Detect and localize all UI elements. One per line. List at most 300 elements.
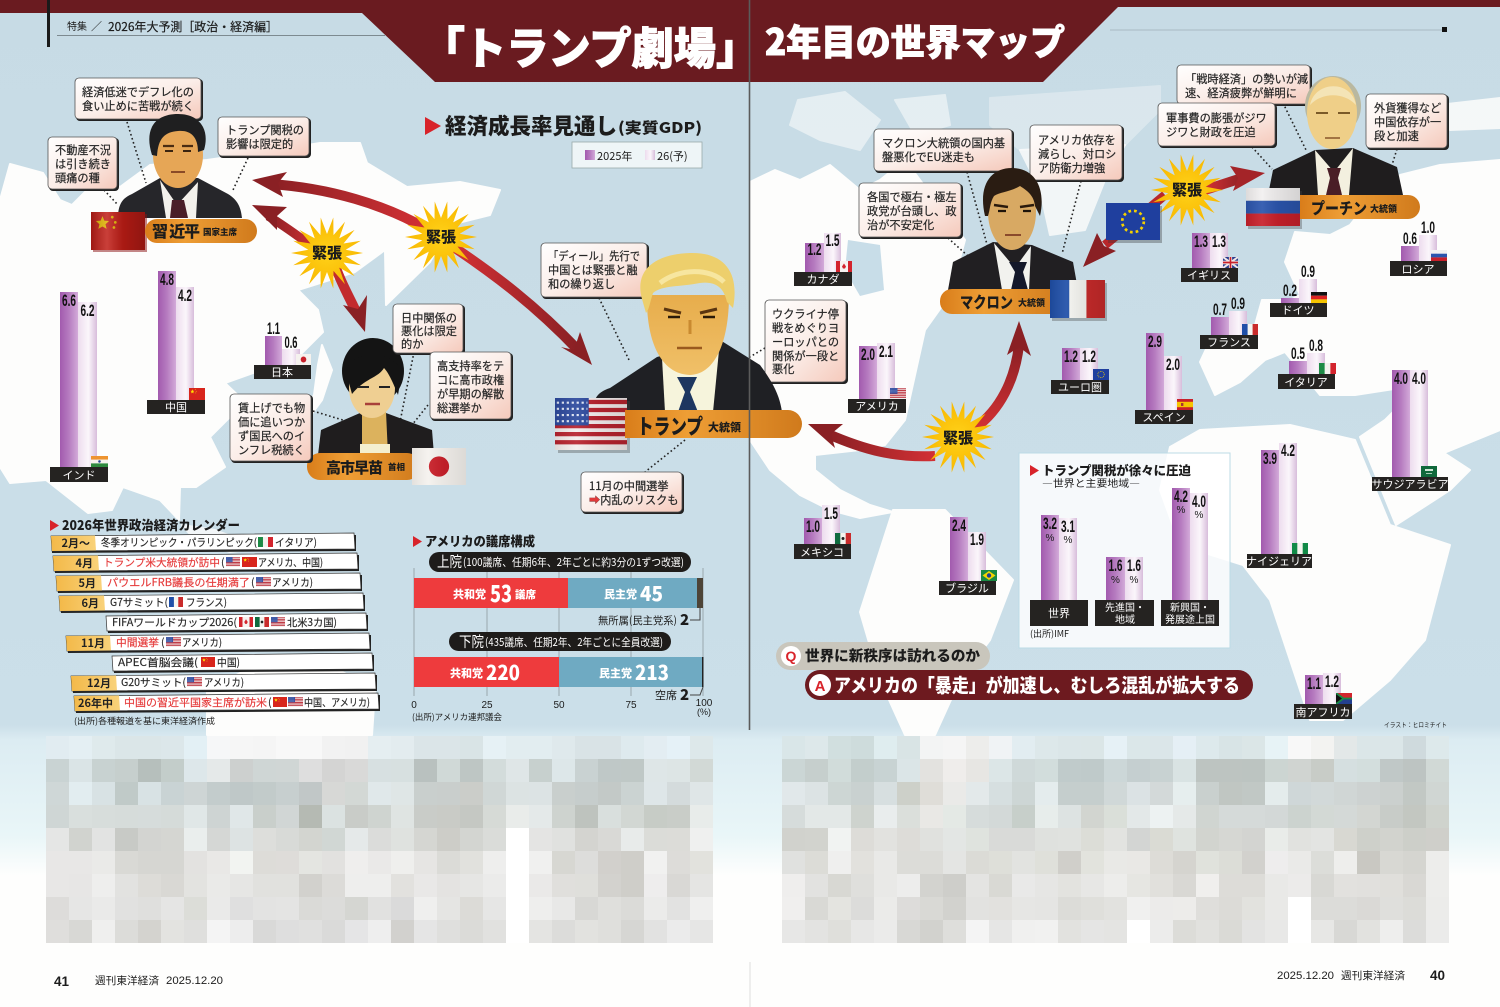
legend: 26(予) (657, 148, 688, 164)
callout: Ukraine: ウクライナ停 (772, 306, 839, 322)
row: within 2026 (74, 693, 380, 713)
calendar heading: 2026年世界政治経済カレンダー (62, 515, 240, 534)
callout: far right: 政党が台頭し、政 (867, 203, 957, 219)
bars: advanced: 1.6 (1108, 557, 1122, 575)
vacant label: 空席 (655, 687, 677, 703)
arrow: tension to USA (808, 424, 935, 456)
bar chart: Spain: 2.0 (1166, 356, 1180, 374)
footer left: 週刊東洋経済 (95, 973, 160, 988)
bars: advanced (1095, 557, 1154, 626)
heading: GDP outlook (425, 109, 702, 141)
bar chart: India: 6.2 (80, 302, 94, 320)
heading: tariff (1030, 460, 1191, 490)
tension burst left 1: 緊張 (312, 242, 342, 263)
bars: emerging: % (1177, 505, 1186, 516)
name plate: Trump: 大統領 (708, 419, 741, 435)
row: April: ( (221, 555, 225, 570)
row: February: 冬季オリンピック・パラリンピック( (101, 535, 257, 550)
bar chart: Russia: 1.0 (1421, 219, 1435, 237)
name plate: Takaichi: 首相 (388, 461, 405, 473)
flag: Russia (1246, 188, 1302, 229)
bar chart: Brazil: 1.9 (970, 531, 984, 549)
callout: midterms: 11月の中間選挙 (589, 478, 669, 494)
callout: far right (859, 183, 963, 239)
callout: EU disarray (874, 129, 1014, 173)
name plate: Xi (145, 218, 257, 243)
bar chart: Nigeria: ナイジェリア (1246, 553, 1312, 569)
callout: Japan-China: 的か (401, 336, 423, 352)
flag: France (1050, 280, 1107, 321)
main title left: 」 (716, 13, 760, 77)
bar chart: China: 4.2 (178, 287, 192, 305)
callout: tariffs limited: トランプ関税の (226, 122, 304, 138)
bars: advanced: 先進国・ (1105, 599, 1145, 614)
bars: advanced: 地域 (1115, 611, 1135, 626)
callout: Ukraine (765, 300, 848, 384)
bar chart: Spain (1135, 333, 1193, 425)
bar chart: Eurozone (1051, 348, 1109, 395)
bar chart: USA: アメリカ (855, 398, 899, 414)
bars: emerging: 発展途上国 (1165, 611, 1215, 626)
bar chart: China: 中国 (165, 399, 187, 415)
row: February (51, 533, 356, 553)
senate bar: 53 (490, 575, 512, 609)
portrait: Trump (593, 253, 782, 412)
callout: wages: 賃上げでも物 (238, 400, 305, 416)
bars: world: 世界 (1048, 605, 1070, 621)
row: December: G20サミット( (121, 675, 186, 690)
footer right: 40 (1430, 967, 1445, 983)
callout: EU disarray: 盤悪化でEU迷走も (882, 149, 975, 165)
panel: Takaichi (230, 304, 513, 485)
bar chart: Nigeria: 3.9 (1263, 450, 1277, 468)
tension burst left 2 (405, 202, 477, 272)
bars: world: % (1064, 535, 1073, 546)
bar chart: Mexico: メキシコ (800, 544, 844, 560)
callout: war economy (1177, 65, 1312, 106)
callout: defence (1030, 125, 1124, 182)
callout: midterms (581, 472, 684, 514)
house bar: 213 (635, 657, 669, 686)
portrait: Takaichi (318, 338, 434, 455)
flag: USA (555, 398, 630, 453)
bar chart: Saudi Arabia (1372, 370, 1448, 492)
row: November: 中間選挙 (116, 635, 160, 650)
row: December: アメリカ) (204, 675, 244, 690)
row: May: ( (251, 575, 255, 590)
house bar: 220 (486, 657, 520, 686)
congress heading: アメリカの議席構成 (425, 531, 535, 550)
bars: advanced: % (1111, 575, 1120, 586)
bar chart: Canada: 1.5 (826, 232, 840, 250)
running header: 特集 (67, 18, 87, 33)
name plate: Xi: 習 近平 (152, 218, 200, 242)
tension burst left 2: 緊張 (426, 226, 456, 247)
bar chart: Eurozone: ユーロ圏 (1058, 379, 1102, 395)
row: February: 2月〜 (62, 535, 90, 551)
question pill: 世界に新秩序は訪れるのか (805, 645, 981, 666)
senate bar: 45 (640, 578, 663, 607)
bar chart: Brazil: ブラジル (945, 580, 989, 596)
arrow: tension to France (975, 321, 1031, 428)
flag: Japan (412, 448, 466, 485)
bar chart: UK (1181, 233, 1238, 283)
callout: wages: ず国民へのイ (238, 428, 305, 444)
world map land masses (0, 86, 1500, 735)
bar chart: Canada: 1.2 (808, 241, 822, 259)
bar chart: Germany: ドイツ (1282, 302, 1314, 318)
source: IMF: (出所)IMF (1030, 627, 1069, 640)
axis labels: 50 (553, 700, 565, 711)
heading: tariff: ―世界と主要地域― (1042, 475, 1140, 490)
arrow: tension to Trump (455, 248, 592, 365)
row: APEC: APEC首脳会議( (118, 655, 198, 670)
vacant label: 2 (680, 684, 689, 705)
callout: real estate: は引き続き (55, 156, 111, 172)
callout: Ukraine: 悪化 (772, 361, 794, 377)
callout: tariffs limited: 影響は限定的 (226, 136, 293, 152)
tension burst right top (1151, 154, 1223, 226)
bar chart: Germany (1270, 263, 1327, 318)
bar chart: Mexico: 1.5 (824, 505, 838, 523)
Hudson Bay (845, 240, 884, 296)
bar chart: France: 0.7 (1213, 301, 1227, 319)
congress source: (出所)アメリカ連邦議会 (412, 710, 502, 723)
row: within 2026: ( (268, 695, 272, 710)
bar chart: Japan: 1.1 (267, 320, 280, 338)
bar chart: China: 4.8 (160, 271, 174, 289)
bar chart: UK: 1.3 (1212, 233, 1226, 251)
row: within 2026: 中国の習近平国家主席が訪米 (124, 695, 268, 710)
row: within 2026: 中国、アメリカ) (304, 695, 370, 710)
callout: real estate: 不動産不況 (55, 142, 111, 158)
name plate: Trump: トランプ (637, 411, 703, 441)
bar chart: USA: 2.1 (879, 343, 893, 361)
axis labels (411, 698, 713, 717)
bar chart: Eurozone: 1.2 (1082, 348, 1096, 366)
panel: US Congress seats (411, 531, 713, 723)
legend (572, 142, 702, 168)
bars: emerging: 4.2 (1174, 488, 1188, 506)
arrow: tension to Russia (1205, 166, 1265, 191)
footer left: 41 (54, 973, 69, 989)
callout: early election: コに高市政権 (437, 372, 504, 388)
panel: Xi Jinping (48, 78, 311, 252)
callout: EU disarray: マクロン大統領の国内基 (882, 135, 1005, 151)
question pill: Q (786, 648, 797, 664)
name plate: Macron: マクロン (960, 289, 1013, 313)
bar chart: USA (848, 343, 906, 414)
name plate: Putin: プーチン (1311, 195, 1367, 219)
running header: ／ (91, 20, 102, 33)
bar chart: South Africa (1294, 673, 1352, 720)
row: November: アメリカ) (182, 635, 222, 650)
name plate: Putin (1300, 195, 1420, 219)
bar chart: UK: 1.3 (1194, 233, 1208, 251)
row: June: フランス) (186, 595, 227, 610)
row: May (56, 573, 362, 593)
senate label: (100議席、任期6年、2年ごとに約3分の1ずつ改選) (463, 554, 684, 570)
portrait: Macron (948, 168, 1078, 290)
house label: 下院 (459, 631, 484, 652)
callout: Ukraine: ーロッパとの (772, 334, 839, 350)
callout: early election: 高支持率をテ (437, 358, 504, 374)
bar chart: South Africa: 1.1 (1307, 675, 1321, 693)
row: May: 5月 (78, 575, 96, 591)
callout: Japan-China: 悪化は限定 (401, 323, 457, 339)
heading: GDP outlook: (実質GDP) (618, 117, 702, 138)
illustration credit: イラスト：ヒロミチイト (1384, 719, 1447, 729)
callout: deflation: 食い止めに苦戦が続く (82, 98, 194, 114)
row: April: アメリカ、中国) (258, 555, 323, 570)
panel: Trump (541, 243, 848, 514)
bar chart: Saudi Arabia: 4.0 (1394, 370, 1408, 388)
answer pill: A (815, 678, 826, 695)
row: June: 6月 (82, 595, 99, 611)
arrow: EU to France (1083, 195, 1165, 267)
bars: world: 3.1 (1061, 518, 1075, 536)
bars: world: % (1046, 533, 1055, 544)
panel: Putin (1158, 65, 1449, 229)
bar chart: France (1200, 295, 1258, 350)
row: December: 12月 (87, 675, 111, 691)
bar chart: France: 0.9 (1231, 295, 1245, 313)
house bar: 共和党 (450, 665, 483, 681)
row: February: イタリア) (275, 535, 317, 550)
portrait: Putin (1268, 76, 1403, 195)
bar chart: Italy: イタリア (1284, 374, 1328, 390)
callout: early election: が早期の解散 (437, 386, 504, 402)
blurred body text right (782, 736, 1449, 943)
independents label: 2 (680, 609, 689, 630)
heading: GDP outlook: 経済成長率見通し (445, 109, 617, 141)
callout: deflation (75, 78, 203, 121)
callout: deal: 「ディール」先行で (548, 248, 640, 264)
senate bar: 議席 (515, 587, 536, 602)
bar chart: Japan: 0.6 (284, 334, 298, 352)
header rule right (1110, 27, 1447, 32)
axis labels: 25 (481, 700, 493, 711)
house label: (435議席、任期2年、2年ごとに全員改選) (485, 634, 663, 650)
callout: Japan-China (393, 304, 465, 355)
bar chart: Russia: ロシア (1402, 261, 1434, 277)
bars: advanced: % (1130, 575, 1139, 586)
callout: real estate: 頭痛の種 (55, 170, 100, 186)
panel: tariff pressure chart (1019, 453, 1230, 648)
row: June: G7サミット( (110, 595, 168, 610)
axis labels: (%) (697, 707, 711, 717)
bar chart: Germany: 0.9 (1301, 263, 1315, 281)
bars: emerging: % (1195, 510, 1204, 521)
row: within 2026: 26年中 (78, 695, 113, 711)
tension burst left 1 (291, 218, 363, 288)
callout: wages: ンフレ税続く (238, 442, 305, 458)
bars: emerging: 4.0 (1192, 493, 1206, 511)
callout: early election: 総選挙か (437, 400, 482, 416)
bar chart: Spain: 2.9 (1148, 333, 1162, 351)
name plate: Xi: 国家主席 (203, 226, 238, 238)
bar chart: USA: 2.0 (861, 346, 875, 364)
bar chart: India (50, 292, 108, 483)
row: November: ( (161, 635, 165, 650)
arrow: tension to Japan (336, 268, 367, 332)
bars: emerging (1161, 488, 1219, 626)
tension burst right bottom (922, 402, 994, 472)
row: April (53, 553, 359, 573)
callout: deflation: 経済低迷でデフレ化の (82, 84, 194, 100)
bar chart: Italy: 0.8 (1309, 337, 1323, 355)
bar chart: Japan (254, 320, 311, 380)
bars: world: 3.2 (1043, 515, 1057, 533)
bar chart: Spain: スペイン (1142, 409, 1186, 425)
callout: foreign currency: 段と加速 (1374, 128, 1419, 144)
title banner (0, 0, 1500, 82)
bars: world (1030, 515, 1088, 626)
axis labels: 0 (411, 700, 417, 711)
bar chart: Saudi Arabia: 4.0 (1412, 370, 1426, 388)
bar chart: Russia (1390, 219, 1447, 277)
row: APEC (112, 653, 374, 673)
callout: far right: 各国で極右・極左 (867, 189, 957, 205)
callout: deal (541, 243, 649, 299)
row: World Cup: 北米3カ国) (287, 615, 337, 630)
senate bar: 民主党 (604, 586, 637, 602)
legend: 2025年 (597, 148, 632, 164)
callout: foreign currency: 中国依存が一 (1374, 114, 1441, 130)
callout: deal: 和の繰り返し (548, 276, 615, 292)
callout: wages (230, 394, 313, 463)
row: April: トランプ米大統領が訪中 (103, 555, 220, 570)
senate label: 上院 (437, 551, 462, 572)
bar chart: India: 6.6 (62, 292, 76, 310)
callout: real estate (48, 137, 119, 191)
calendar source: (出所)各種報道を基に東洋経済作成 (74, 714, 215, 727)
callout: military spend: 軍事費の膨張がジワ (1166, 110, 1267, 126)
question pill (776, 642, 990, 670)
senate bar (414, 575, 703, 609)
bars: emerging: 新興国・ (1170, 599, 1210, 614)
bar chart: Germany: 0.2 (1283, 282, 1297, 300)
bar chart: Eurozone: 1.2 (1064, 348, 1078, 366)
heading: tariff: トランプ関税が徐々に圧迫 (1042, 460, 1191, 479)
independents label (598, 608, 700, 630)
callout: war economy: 「戦時経済」の勢いが減 (1185, 71, 1308, 87)
house bar: 民主党 (599, 665, 632, 681)
footer right: 週刊東洋経済 (1341, 968, 1406, 983)
callout: military spend (1158, 103, 1277, 148)
blurred body text left (46, 736, 713, 943)
footer left: 2025.12.20 (166, 975, 223, 987)
senate bar: 共和党 (453, 586, 486, 602)
running header: 2026年大予測［政治・経済編］ (108, 18, 278, 35)
name plate: Trump (625, 410, 802, 441)
bar chart: South Africa: 1.2 (1325, 673, 1339, 691)
main title right: 2年目の世界マップ (765, 14, 1065, 66)
axis labels: 75 (625, 700, 637, 711)
main title left: 「 (421, 12, 465, 76)
arrow: China to Japan (252, 205, 318, 250)
portrait: Xi (118, 114, 242, 218)
bar chart: Nigeria: 4.2 (1281, 442, 1295, 460)
row: APEC: 中国) (217, 655, 240, 670)
bar chart: Russia: 0.6 (1403, 230, 1417, 248)
bar chart: Mexico: 1.0 (806, 518, 820, 536)
row: November: 11月 (81, 635, 105, 651)
row: April: 4月 (76, 555, 93, 571)
row: World Cup: FIFAワールドカップ2026( (112, 615, 237, 630)
row: May: パウエルFRB議長の任期満了 (107, 575, 250, 590)
grid lines (414, 568, 703, 696)
senate label (429, 551, 691, 572)
bars: advanced: 1.6 (1127, 557, 1141, 575)
footer right (1277, 967, 1445, 983)
bar chart: India: インド (62, 467, 96, 483)
name plate: Takaichi: 高市早苗 (326, 457, 383, 478)
callout: foreign currency: 外貨獲得など (1374, 100, 1441, 116)
callout: defence: 減らし、対ロシ (1038, 146, 1116, 162)
bar chart: France: フランス (1207, 334, 1251, 350)
row: World Cup (106, 613, 368, 633)
bar chart: Italy: 0.5 (1291, 345, 1305, 363)
panel: calendar (50, 515, 380, 727)
bar chart: Nigeria (1246, 442, 1312, 569)
callout: Ukraine: 戦をめぐりヨ (772, 320, 839, 336)
house label (449, 631, 671, 652)
running header (47, 0, 385, 47)
row: May: アメリカ) (272, 575, 313, 590)
callout: early election (430, 352, 513, 421)
independents label: 無所属(民主党系) (598, 613, 677, 628)
tension burst right bottom: 緊張 (943, 427, 973, 448)
callout: military spend: ジワと財政を圧迫 (1166, 124, 1256, 140)
row: November (66, 633, 371, 653)
callout: defence: ア防衛力増強 (1038, 160, 1105, 176)
flag: China (91, 212, 147, 252)
flag: EU (1106, 203, 1162, 243)
callout: midterms: ➡内乱のリスクも (589, 492, 679, 508)
name plate: Macron: 大統領 (1018, 296, 1045, 309)
row: June (59, 593, 365, 613)
bar chart: Canada (794, 232, 852, 287)
arrow: China to Trump (252, 172, 425, 228)
callout: far right: 治が不安定化 (867, 217, 934, 233)
bar chart: South Africa: 南アフリカ (1296, 704, 1350, 720)
bar chart: Brazil: 2.4 (952, 517, 967, 535)
panel: Macron (859, 125, 1162, 321)
tension burst right top: 緊張 (1172, 179, 1202, 200)
bar chart: Saudi Arabia: サウジアラビア (1372, 476, 1448, 492)
bar chart: China (147, 271, 205, 415)
house bar (414, 657, 704, 687)
callout: wages: 価に追いつか (238, 414, 305, 430)
bar chart: Brazil (939, 517, 997, 596)
bar chart: Japan: 日本 (271, 364, 293, 380)
answer pill: アメリカの「暴走」が加速し、むしろ混乱が拡大する (834, 671, 1240, 698)
name plate: Takaichi (307, 453, 420, 480)
centre fold line (748, 0, 750, 730)
bar chart: UK: イギリス (1187, 267, 1231, 283)
bar chart: Canada: カナダ (806, 271, 840, 287)
footer left (54, 973, 223, 989)
main title left: トランプ劇場 (464, 13, 716, 77)
footer right: 2025.12.20 (1277, 970, 1334, 982)
row: December (71, 673, 377, 693)
callout: defence: アメリカ依存を (1038, 132, 1116, 148)
vacant label (655, 684, 703, 705)
axis labels: 100 (696, 698, 713, 709)
name plate: Putin: 大統領 (1370, 202, 1397, 215)
callout: war economy: 速、経済疲弊が鮮明に (1185, 85, 1297, 101)
